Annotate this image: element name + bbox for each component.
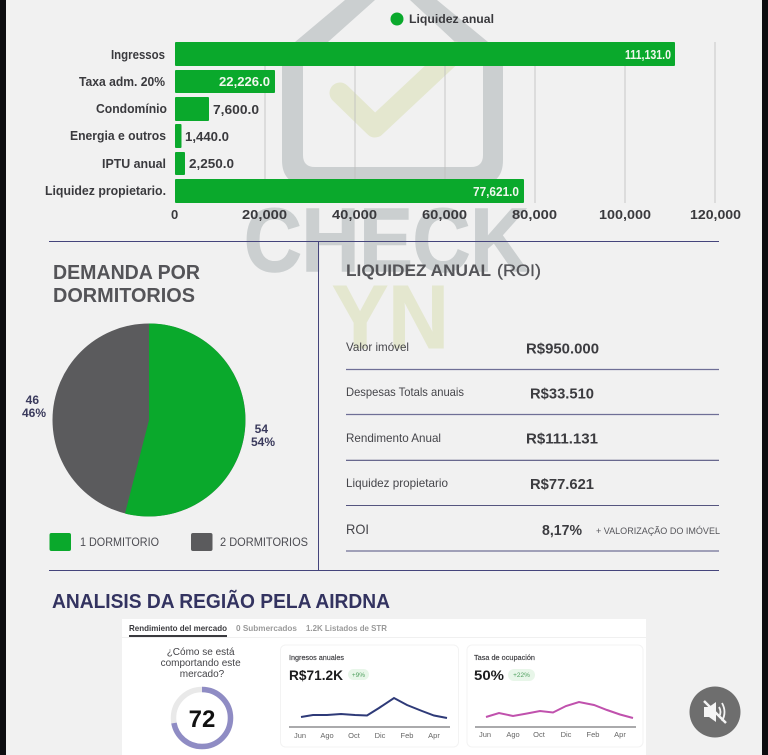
tabs: 1.2K Listados de STR [306,623,387,633]
card: ingresos anuales: Oct [348,731,361,740]
card: ingresos anuales: +9% [352,672,365,679]
row: rendimento: Rendimento Anual [346,431,441,445]
card: tasa de ocupación: +22% [513,672,530,679]
left black edge [0,0,6,755]
bar: Taxa adm.: 22,226.0 [219,74,270,89]
grid lines [265,42,715,203]
bar: IPTU anual: 2,250.0 [189,156,234,171]
bar: Ingressos: Ingressos [111,48,165,62]
card: ingresos anuales: Dic [375,731,386,740]
card: ingresos anuales: Ingresos anuales [289,653,344,662]
card: tasa de ocupación [467,645,643,747]
x axis labels: 80,000 [512,207,557,222]
card: tasa de ocupación: Tasa de ocupación [474,653,535,662]
pie label 46: 46 [26,393,39,407]
bar: Liquidez propietario [45,179,524,203]
pie chart [52,324,246,516]
right black edge [762,0,768,755]
panel dividers [49,241,719,570]
panel: demanda por dormitorios [22,262,308,551]
card: tasa de ocupación: Apr [614,730,626,739]
row: liquidez [346,476,719,506]
card: tasa de ocupación: 50% [474,667,505,683]
icon: muted speaker button [690,686,740,738]
bar: Energia e outros: 1,440.0 [185,129,229,144]
legend: Liquidez anual: Liquidez anual [409,12,494,26]
row: liquidez: Liquidez propietario [346,476,448,490]
row: liquidez: R$77.621 [530,476,594,493]
card: tasa de ocupación: Ago [506,730,520,739]
bar: IPTU anual: IPTU anual [102,157,166,171]
bar: Ingressos [111,42,675,66]
bar: Energia e outros [70,124,229,148]
pie label 54: 54% [251,435,275,449]
card: ingresos anuales [280,645,458,747]
row: ROI: 8,17% [542,522,582,539]
row: despesas: R$33.510 [530,386,594,402]
tabs: Rendimiento del mercado [129,623,227,633]
bar: IPTU anual [102,152,234,175]
card: ingresos anuales: Jun [294,731,306,740]
row: rendimento: R$111.131 [526,430,598,448]
x axis labels: 0 [171,207,178,222]
bar chart [45,42,741,222]
panel: airdna screenshot [122,619,646,755]
row: valor imóvel [346,340,719,370]
tabs: 0 Submercados [236,623,297,633]
row: ROI [346,521,720,551]
bar: Energia e outros: Energia e outros [70,129,166,143]
row: despesas [346,385,719,414]
legend: 1 dormitorio: 1 DORMITORIO [80,535,159,549]
score question: ¿Cómo se está [167,647,235,658]
card: ingresos anuales: R$71.2K [289,667,343,683]
card: ingresos anuales: Ago [320,731,334,740]
tabs [122,623,646,638]
pie label 54: 54 [255,422,268,436]
x axis labels: 100,000 [599,207,651,222]
heading: LIQUIDEZ ANUAL [346,261,491,280]
bar: Liquidez propietario: 77,621.0 [473,184,519,199]
watermark: house logo [282,0,503,185]
card: tasa de ocupación: Jun [479,730,491,739]
legend: 1 dormitorio [50,533,159,551]
row: valor imóvel: Valor imóvel [346,340,409,354]
bar: Condomínio: Condomínio [96,102,167,116]
row: despesas: Despesas Totals anuais [346,385,464,399]
row: ROI: + VALORIZAÇÃO DO IMÓVEL [596,526,720,537]
score question: comportando este [161,658,241,669]
card: ingresos anuales: Feb [401,731,413,740]
x axis labels: 20,000 [242,207,287,222]
heading: DORMITORIOS [53,285,195,307]
watermark: CHECK: CHECK [244,191,528,291]
heading: (ROI) [497,261,541,280]
heading: DEMANDA POR [53,262,201,284]
x axis labels: 40,000 [332,207,377,222]
bar: Condomínio [96,97,259,121]
x axis labels: 60,000 [422,207,467,222]
legend: 2 dormitorios: 2 DORMITORIOS [220,535,308,549]
watermark: YN: YN [332,268,449,368]
x axis labels [171,207,741,222]
card: tasa de ocupación: Oct [533,730,546,739]
score gauge [174,690,230,746]
row: ROI: ROI [346,521,369,537]
bar: Ingressos: 111,131.0 [625,47,671,62]
heading: analisis da região: ANALISIS DA REGIÃO PELA AIRDNA [52,590,390,613]
bar: Taxa adm.: Taxa adm. 20% [79,75,165,89]
score gauge: 72 [189,706,215,733]
pie label 46: 46% [22,406,46,420]
card: ingresos anuales: Apr [428,731,440,740]
row: rendimento [346,430,719,460]
card: tasa de ocupación: Dic [561,730,572,739]
legend: 2 dormitorios [191,533,308,551]
score question: mercado? [180,669,225,680]
panel: liquidez anual ROI [346,261,720,551]
row: valor imóvel: R$950.000 [526,340,599,358]
x axis labels: 120,000 [690,207,741,222]
card: tasa de ocupación: Feb [587,730,599,739]
bar: Condomínio: 7,600.0 [213,102,259,117]
bar: Liquidez propietario: Liquidez propietario. [45,184,166,198]
bar: Taxa adm. [79,70,275,93]
